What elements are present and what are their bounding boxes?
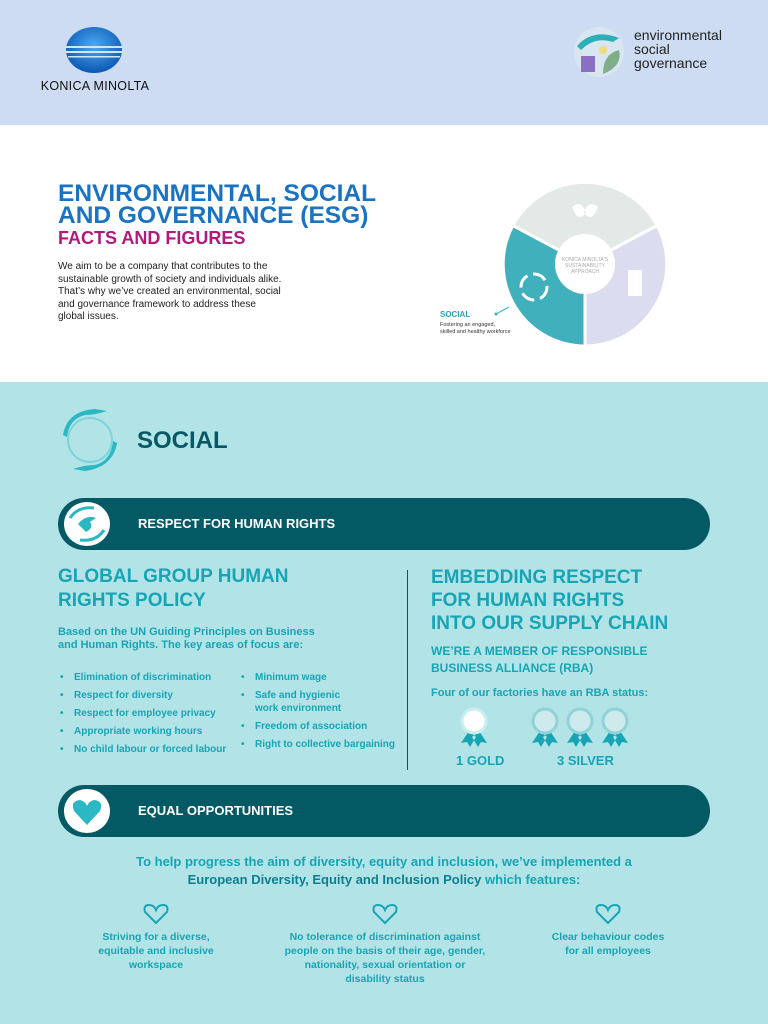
- feature: diverse workspace: equitable and inclusive: [98, 945, 214, 957]
- heading: social: SOCIAL: [137, 427, 228, 454]
- banner: equal opportunities: [58, 785, 710, 837]
- feature: no discrimination: [285, 904, 485, 985]
- logo: esg: environmental: [634, 27, 722, 43]
- list left: Appropriate working hours: [74, 726, 202, 737]
- panel: supply chain: 1 GOLD: [456, 753, 504, 768]
- list right: Safe and hygienic: [255, 690, 340, 701]
- panel: global group human rights policy: and Human Rights. The key areas of focus are:: [58, 639, 303, 651]
- donut chart: SUSTAINABILITY: [565, 263, 606, 269]
- icon: heart hands: [64, 789, 110, 833]
- header band: [0, 0, 768, 125]
- donut chart: SOCIAL: [440, 310, 470, 319]
- panel: global group human rights policy: GLOBAL GROUP HUMAN: [58, 566, 288, 587]
- donut chart: [440, 184, 666, 344]
- panel: supply chain: Four of our factories have an RBA status:: [431, 687, 648, 699]
- panel: supply chain: EMBEDDING RESPECT: [431, 567, 642, 588]
- list right: Right to collective bargaining: [255, 739, 395, 750]
- panel: supply chain: INTO OUR SUPPLY CHAIN: [431, 613, 668, 634]
- panel: supply chain: BUSINESS ALLIANCE (RBA): [431, 661, 593, 675]
- donut chart: Fostering an engaged,: [440, 322, 496, 328]
- intro text: diversity policy: [136, 854, 632, 887]
- feature: behaviour codes: for all employees: [565, 945, 651, 957]
- list left: No child labour or forced labour: [74, 744, 226, 755]
- list left: [60, 672, 226, 755]
- logo: esg: governance: [634, 55, 707, 71]
- panel: supply chain: [431, 567, 668, 768]
- panel: global group human rights policy: RIGHTS POLICY: [58, 590, 206, 611]
- list left: Respect for employee privacy: [74, 708, 216, 719]
- icon: hands: [63, 409, 117, 471]
- feature: diverse workspace: workspace: [129, 959, 183, 971]
- icon: dove: [64, 502, 110, 546]
- banner: respect for human rights: RESPECT FOR HUMAN RIGHTS: [138, 516, 335, 531]
- social heading: [63, 409, 228, 471]
- logo: konica minolta: KONICA MINOLTA: [41, 79, 150, 93]
- feature: no discrimination: disability status: [345, 973, 425, 985]
- feature: diverse workspace: Striving for a diverse,: [102, 931, 210, 943]
- panel: supply chain: WE’RE A MEMBER OF RESPONSIBLE: [431, 644, 647, 658]
- panel: supply chain: FOR HUMAN RIGHTS: [431, 590, 624, 611]
- donut chart: KONICA MINOLTA'S: [562, 257, 609, 263]
- intro text: diversity policy: To help progress the aim of diversity, equity and inclusion, we’ve implemented a: [136, 854, 632, 869]
- feature: diverse workspace: [98, 904, 214, 971]
- list right: [241, 672, 395, 750]
- list right: work environment: [255, 703, 341, 714]
- title: AND GOVERNANCE (ESG): [58, 202, 368, 229]
- banner: respect for human rights: [58, 498, 710, 550]
- intro panel: [0, 125, 768, 382]
- intro text: We aim to be a company that contributes to the sustainable growth of society and individuals alike. That’s why we’ve created an environmental, social and governance framework to address these global issues.: [58, 261, 281, 322]
- list left: Elimination of discrimination: [74, 672, 211, 683]
- list left: Respect for diversity: [74, 690, 173, 701]
- banner: equal opportunities: EQUAL OPPORTUNITIES: [138, 803, 293, 818]
- feature: behaviour codes: [552, 904, 664, 957]
- panel: supply chain: 3 SILVER: [557, 753, 614, 768]
- logo: esg: social: [634, 41, 670, 57]
- title: ENVIRONMENTAL, SOCIAL: [58, 180, 376, 207]
- subtitle: FACTS AND FIGURES: [58, 228, 245, 248]
- donut chart: APPROACH: [571, 269, 599, 275]
- logo: esg: [574, 27, 722, 77]
- feature: no discrimination: nationality, sexual orientation or: [305, 959, 465, 971]
- feature: behaviour codes: Clear behaviour codes: [552, 931, 664, 943]
- icon: medals: [460, 708, 628, 747]
- panel: global group human rights policy: [58, 566, 395, 755]
- panel: global group human rights policy: Based on the UN Guiding Principles on Business: [58, 626, 315, 638]
- feature: no discrimination: people on the basis of their age, gender,: [285, 945, 485, 957]
- intro text: diversity policy: European Diversity, Equity and Inclusion Policy which features:: [188, 872, 580, 887]
- logo: konica minolta: [41, 27, 150, 93]
- donut chart: skilled and healthy workforce: [440, 329, 511, 335]
- list right: Minimum wage: [255, 672, 327, 683]
- feature: no discrimination: No tolerance of discrimination against: [290, 931, 480, 943]
- list right: Freedom of association: [255, 721, 367, 732]
- title: [58, 180, 376, 229]
